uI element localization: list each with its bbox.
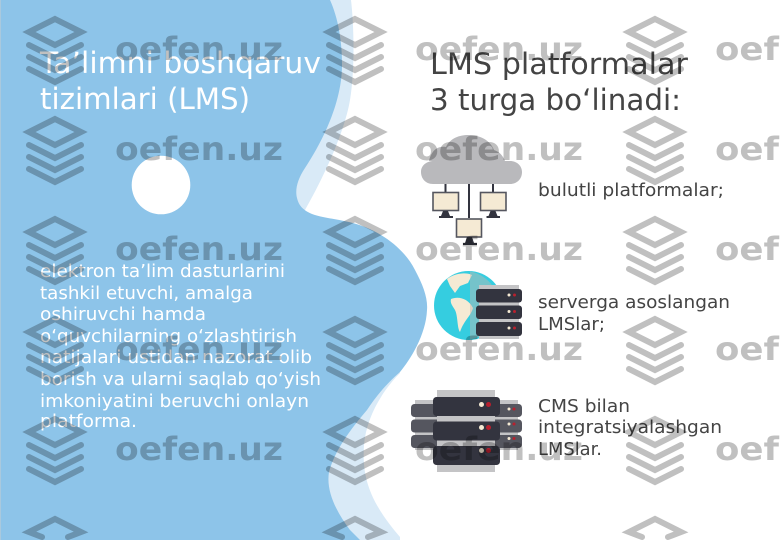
watermark: repeated stack icons and oefen.uz text: oef <box>715 130 780 168</box>
text block: LMS definition: oshiruvchi hamda <box>40 304 206 325</box>
left edge line <box>0 0 1 540</box>
watermark: repeated stack icons and oefen.uz text: oef <box>715 230 780 268</box>
watermark: repeated stack icons and oefen.uz text: oefen.uz <box>115 330 283 368</box>
text: server-based LMS: LMSlar; <box>538 314 605 335</box>
heading: right title <box>430 47 688 117</box>
watermark: repeated stack icons and oefen.uz text: oefen.uz <box>115 230 283 268</box>
text: server-based LMS: serverga asoslangan <box>538 292 730 313</box>
watermark: repeated stack icons and oefen.uz text: oefen.uz <box>415 430 583 468</box>
left blue panel <box>0 0 427 540</box>
text block: LMS definition: o‘quvchilarning o‘zlashtirish <box>40 326 297 347</box>
icon: server racks <box>411 390 522 472</box>
white circle <box>132 156 190 214</box>
heading: left title <box>39 46 321 116</box>
watermark: repeated stack icons and oefen.uz text: oef <box>715 330 780 368</box>
watermark: repeated stack icons and oefen.uz text: oefen.uz <box>115 30 283 68</box>
text: CMS integrated LMS: LMSlar. <box>538 439 602 460</box>
heading: right title: 3 turga bo‘linadi: <box>430 83 681 117</box>
watermark: repeated stack icons and oefen.uz text: oefen.uz <box>415 130 583 168</box>
watermark: repeated stack icons and oefen.uz text: oef <box>715 30 780 68</box>
text: cloud platforms: bulutli platformalar; <box>538 180 724 201</box>
text block: LMS definition: platforma. <box>40 411 137 432</box>
text block: LMS definition: imkoniyatini beruvchi onlayn <box>40 391 309 412</box>
watermark: repeated stack icons and oefen.uz text: oef <box>715 430 780 468</box>
heading: left title: Ta’limni boshqaruv <box>39 46 321 80</box>
text block: LMS definition: tashkil etuvchi, amalga <box>40 283 253 304</box>
text: CMS integrated LMS <box>538 396 722 460</box>
light blue wave band <box>250 0 400 540</box>
text: server-based LMS <box>538 292 730 335</box>
watermark: repeated stack icons and oefen.uz text: oefen.uz <box>115 130 283 168</box>
text: CMS integrated LMS: CMS bilan <box>538 396 630 417</box>
icon: globe with servers <box>434 271 522 340</box>
watermark: repeated stack icons and oefen.uz text: oefen.uz <box>115 430 283 468</box>
text block: LMS definition: borish va ularni saqlab qo‘yish <box>40 369 321 390</box>
heading: left title: tizimlari (LMS) <box>40 82 250 116</box>
text block: LMS definition <box>40 261 321 432</box>
text block: LMS definition: natijalari ustidan nazorat olib <box>40 347 312 368</box>
icon: cloud with monitors <box>421 135 522 245</box>
watermark: repeated stack icons and oefen.uz text: oefen.uz <box>415 230 583 268</box>
text: CMS integrated LMS: integratsiyalashgan <box>538 417 722 438</box>
watermark: repeated stack icons and oefen.uz text: oefen.uz <box>415 30 583 68</box>
heading: right title: LMS platformalar <box>430 47 688 81</box>
watermark: repeated stack icons and oefen.uz text: oefen.uz <box>415 330 583 368</box>
text block: LMS definition: elektron ta’lim dasturlarini <box>40 261 285 282</box>
